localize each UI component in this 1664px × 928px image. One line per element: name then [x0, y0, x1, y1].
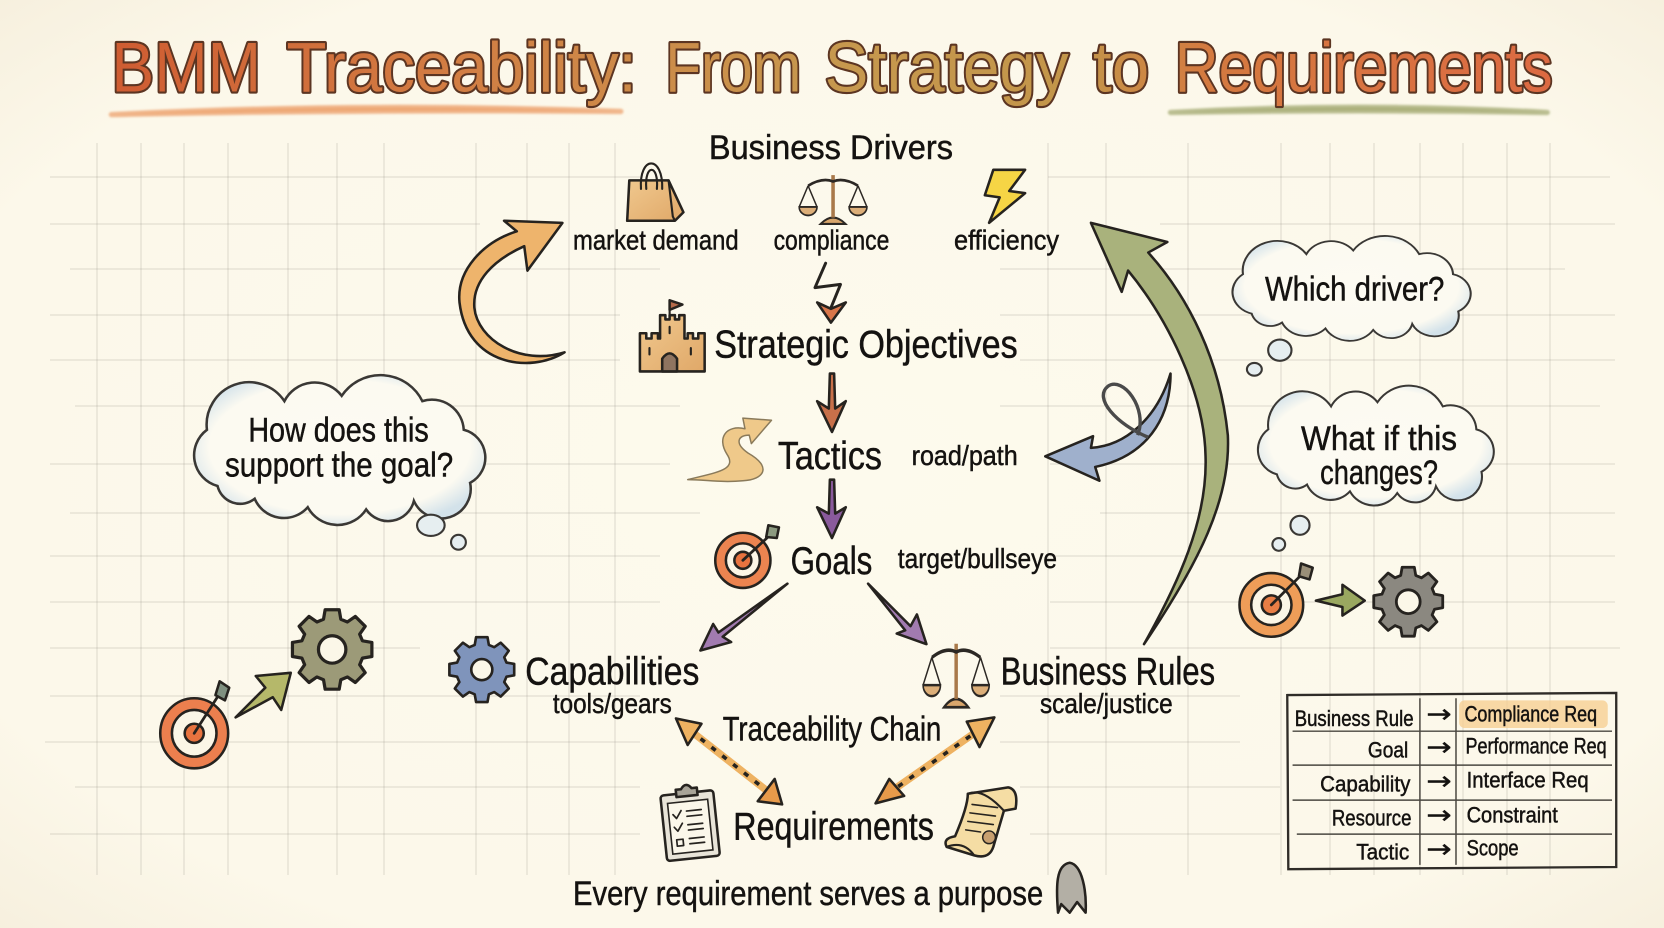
icon: justice scales — [923, 644, 989, 707]
title: BMM — [111, 28, 261, 106]
mapping table: Goal — [1368, 738, 1408, 763]
tagline: Every requirement serves a purpose — [573, 875, 1043, 913]
mapping table: Business Rule — [1295, 706, 1414, 731]
heading: strategic objectives: Strategic Objectives — [714, 323, 1018, 367]
icon: target left — [160, 681, 229, 768]
title: Traceability: — [287, 28, 637, 106]
icon: road path — [688, 418, 772, 481]
heading: business drivers: Business Drivers — [709, 129, 953, 167]
icon: compliance scales — [799, 175, 867, 224]
label: scale/justice: scale/justice — [1040, 688, 1173, 719]
title underline: orange — [111, 107, 621, 115]
label: target/bullseye: target/bullseye — [898, 543, 1057, 574]
arrow: objectives to tactics — [817, 374, 846, 432]
label: tools/gears: tools/gears — [553, 688, 672, 719]
label: market demand: market demand — [573, 224, 739, 255]
arrow: blue loop — [1045, 374, 1171, 481]
arrow: goals to business rules — [868, 584, 926, 644]
arrow: lightning drivers to objectives — [815, 263, 846, 323]
thought bubble: what if this changes — [1258, 386, 1494, 551]
arrow: right olive — [1316, 585, 1365, 616]
icon: castle — [640, 300, 705, 371]
icon: olive gear — [292, 610, 372, 689]
arrow: green long feedback — [1091, 223, 1228, 644]
icon: lightning bolt — [985, 170, 1025, 223]
icon: blue gear — [449, 637, 514, 702]
heading: tactics: Tactics — [778, 434, 882, 478]
label: traceability chain: Traceability Chain — [723, 711, 941, 749]
heading: goals: Goals — [791, 539, 872, 583]
label: compliance: compliance — [774, 224, 889, 255]
mapping table: Constraint — [1467, 802, 1559, 827]
mapping table: Capability — [1320, 772, 1411, 797]
icon: scroll — [946, 787, 1016, 856]
mapping table: Resource — [1332, 806, 1411, 831]
mapping table: → — [1426, 767, 1452, 797]
mapping table: → — [1426, 700, 1452, 730]
icon: clipboard — [659, 782, 720, 861]
title: Strategy — [825, 28, 1069, 106]
thought bubble: how does this support the goal: support the goal? — [225, 446, 453, 484]
arrow: orange curved loop — [459, 221, 565, 363]
arrow: business rules to requirements — [876, 717, 994, 803]
mapping table: Scope — [1467, 835, 1519, 860]
mapping table: → — [1426, 834, 1452, 864]
title underline: green — [1171, 107, 1547, 112]
icon: grey marker — [1057, 863, 1086, 913]
mapping table: Interface Req — [1467, 767, 1589, 792]
label: road/path: road/path — [912, 440, 1018, 471]
label: efficiency: efficiency — [954, 224, 1059, 255]
heading: business rules: Business Rules — [1001, 649, 1215, 693]
mapping table — [1287, 693, 1616, 869]
arrow: tactics to goals — [817, 480, 846, 538]
heading: requirements: Requirements — [733, 804, 934, 848]
thought bubble: which driver — [1232, 236, 1471, 376]
icon: grey gear — [1374, 567, 1443, 636]
icon: target to gear, right — [1240, 564, 1443, 637]
thought bubble: what if this changes: changes? — [1320, 454, 1438, 492]
mapping table: Tactic — [1356, 840, 1409, 865]
thought bubble: what if this changes: What if this — [1301, 420, 1457, 458]
icon: target right — [1240, 564, 1313, 637]
arrow: capabilities to requirements — [676, 718, 782, 804]
title: to — [1093, 28, 1149, 106]
heading: capabilities: Capabilities — [525, 649, 699, 693]
icon: target to gear, left — [160, 610, 372, 768]
table highlight — [1459, 700, 1608, 728]
icon: target goals — [715, 525, 779, 588]
title — [111, 28, 1553, 106]
mapping table: → — [1426, 801, 1452, 831]
thought bubble: how does this support the goal: How does this — [248, 411, 429, 449]
title: Requirements — [1175, 28, 1553, 106]
arrow: left olive — [236, 673, 291, 717]
mapping table: Compliance Req — [1464, 702, 1597, 727]
thought bubble: which driver: Which driver? — [1265, 270, 1444, 308]
mapping table: Performance Req — [1466, 733, 1607, 758]
icon: shopping bag — [627, 163, 683, 221]
mapping table: → — [1426, 733, 1452, 763]
title: From — [665, 28, 801, 106]
arrow: goals to capabilities — [700, 584, 787, 651]
thought bubble: how does this support the goal — [194, 375, 485, 550]
